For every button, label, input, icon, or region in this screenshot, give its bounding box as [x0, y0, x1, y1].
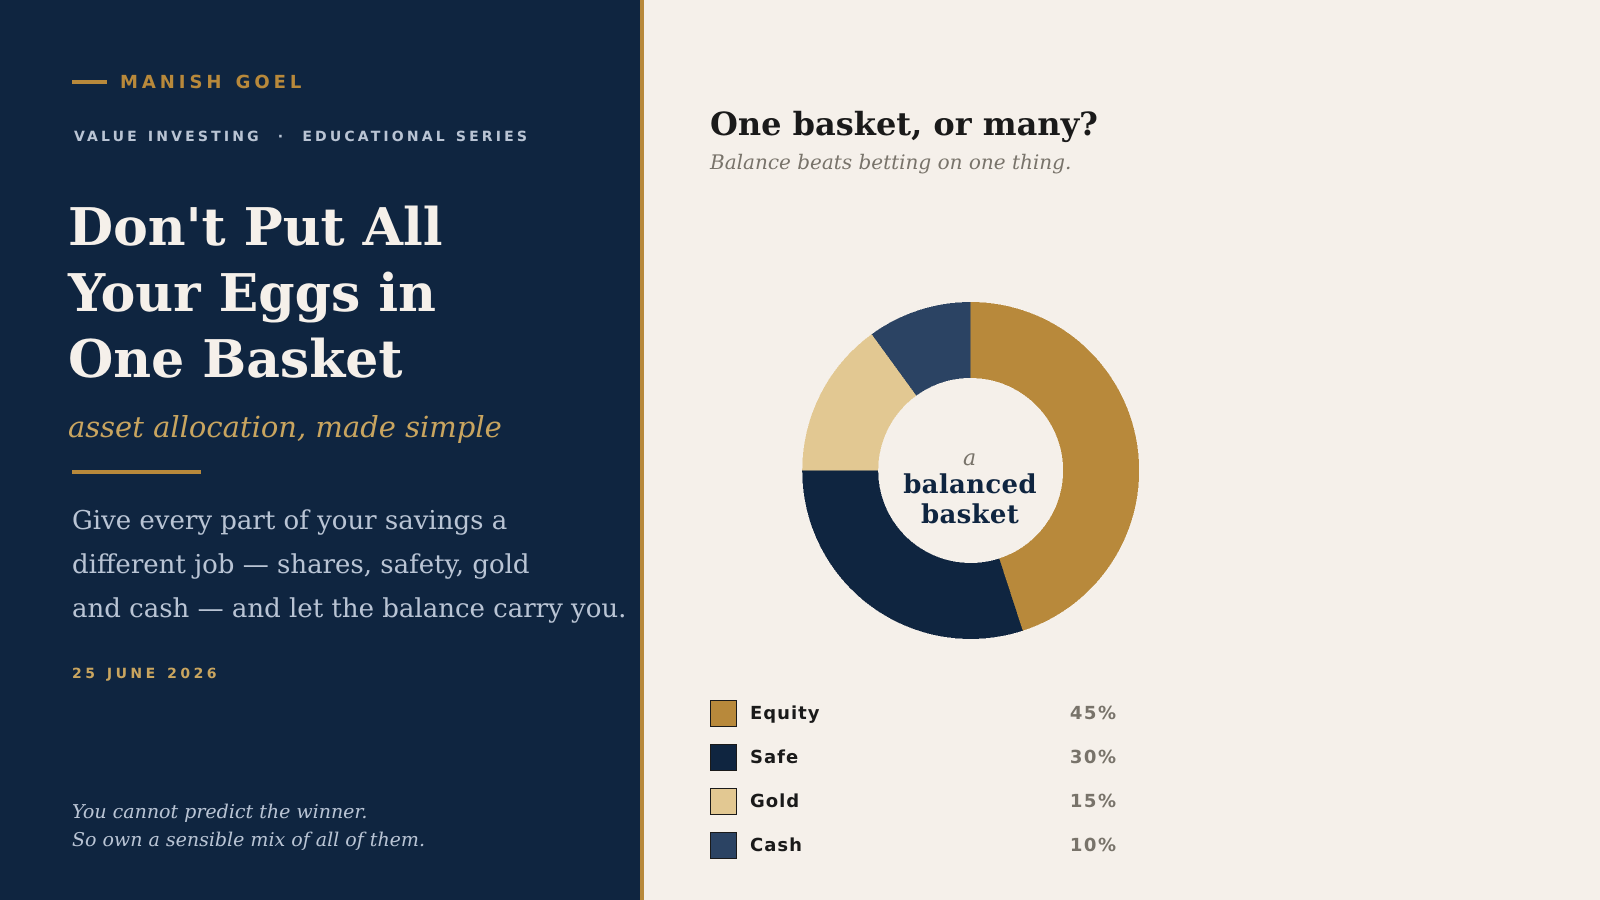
- legend row: cash: [710, 832, 1118, 859]
- body text: different job — shares, safety, gold: [72, 550, 530, 580]
- tagline: asset allocation, made simple: [68, 410, 502, 444]
- slice: equity 45%: [971, 302, 1139, 631]
- legend row: cash: 10%: [1070, 835, 1118, 856]
- panel: left navy panel: [0, 0, 644, 900]
- legend row: safe: [710, 744, 1118, 771]
- centre label: [903, 446, 1037, 530]
- legend row: gold: 15%: [1070, 791, 1118, 812]
- title: Your Eggs in: [68, 263, 436, 324]
- centre label: basket: [921, 500, 1019, 530]
- legend row: equity: 45%: [1070, 703, 1118, 724]
- accent divider: [72, 470, 201, 474]
- closing note: So own a sensible mix of all of them.: [72, 829, 425, 851]
- legend row: equity: [710, 700, 1118, 727]
- slice: cash 10%: [872, 302, 971, 396]
- slice: gold 15%: [802, 334, 916, 470]
- legend row: cash: Cash: [750, 835, 803, 856]
- legend: [710, 700, 1118, 859]
- legend row: safe: 30%: [1070, 747, 1118, 768]
- title: Don't Put All: [68, 197, 443, 258]
- body text: and cash — and let the balance carry you.: [72, 594, 626, 624]
- legend row: safe: Safe: [750, 747, 799, 768]
- date: 25 JUNE 2026: [72, 666, 220, 682]
- body text: [72, 506, 626, 624]
- chart heading: One basket, or many?: [710, 105, 1098, 143]
- body text: Give every part of your savings a: [72, 506, 507, 536]
- donut chart: [802, 302, 1139, 639]
- series label: VALUE INVESTING · EDUCATIONAL SERIES: [74, 129, 530, 145]
- title: [68, 197, 443, 390]
- legend row: equity: Equity: [750, 703, 821, 724]
- closing note: [72, 801, 425, 851]
- legend row: gold: [710, 788, 1118, 815]
- panel: right chart panel: [644, 0, 1600, 900]
- legend row: gold: Gold: [750, 791, 800, 812]
- chart subheading: Balance beats betting on one thing.: [710, 150, 1071, 174]
- slice: safe 30%: [802, 470, 1023, 639]
- closing note: You cannot predict the winner.: [72, 801, 367, 823]
- title: One Basket: [68, 329, 402, 390]
- centre label: a: [963, 446, 976, 471]
- author rule: [72, 80, 107, 84]
- centre label: balanced: [903, 470, 1037, 500]
- author name: MANISH GOEL: [120, 72, 305, 93]
